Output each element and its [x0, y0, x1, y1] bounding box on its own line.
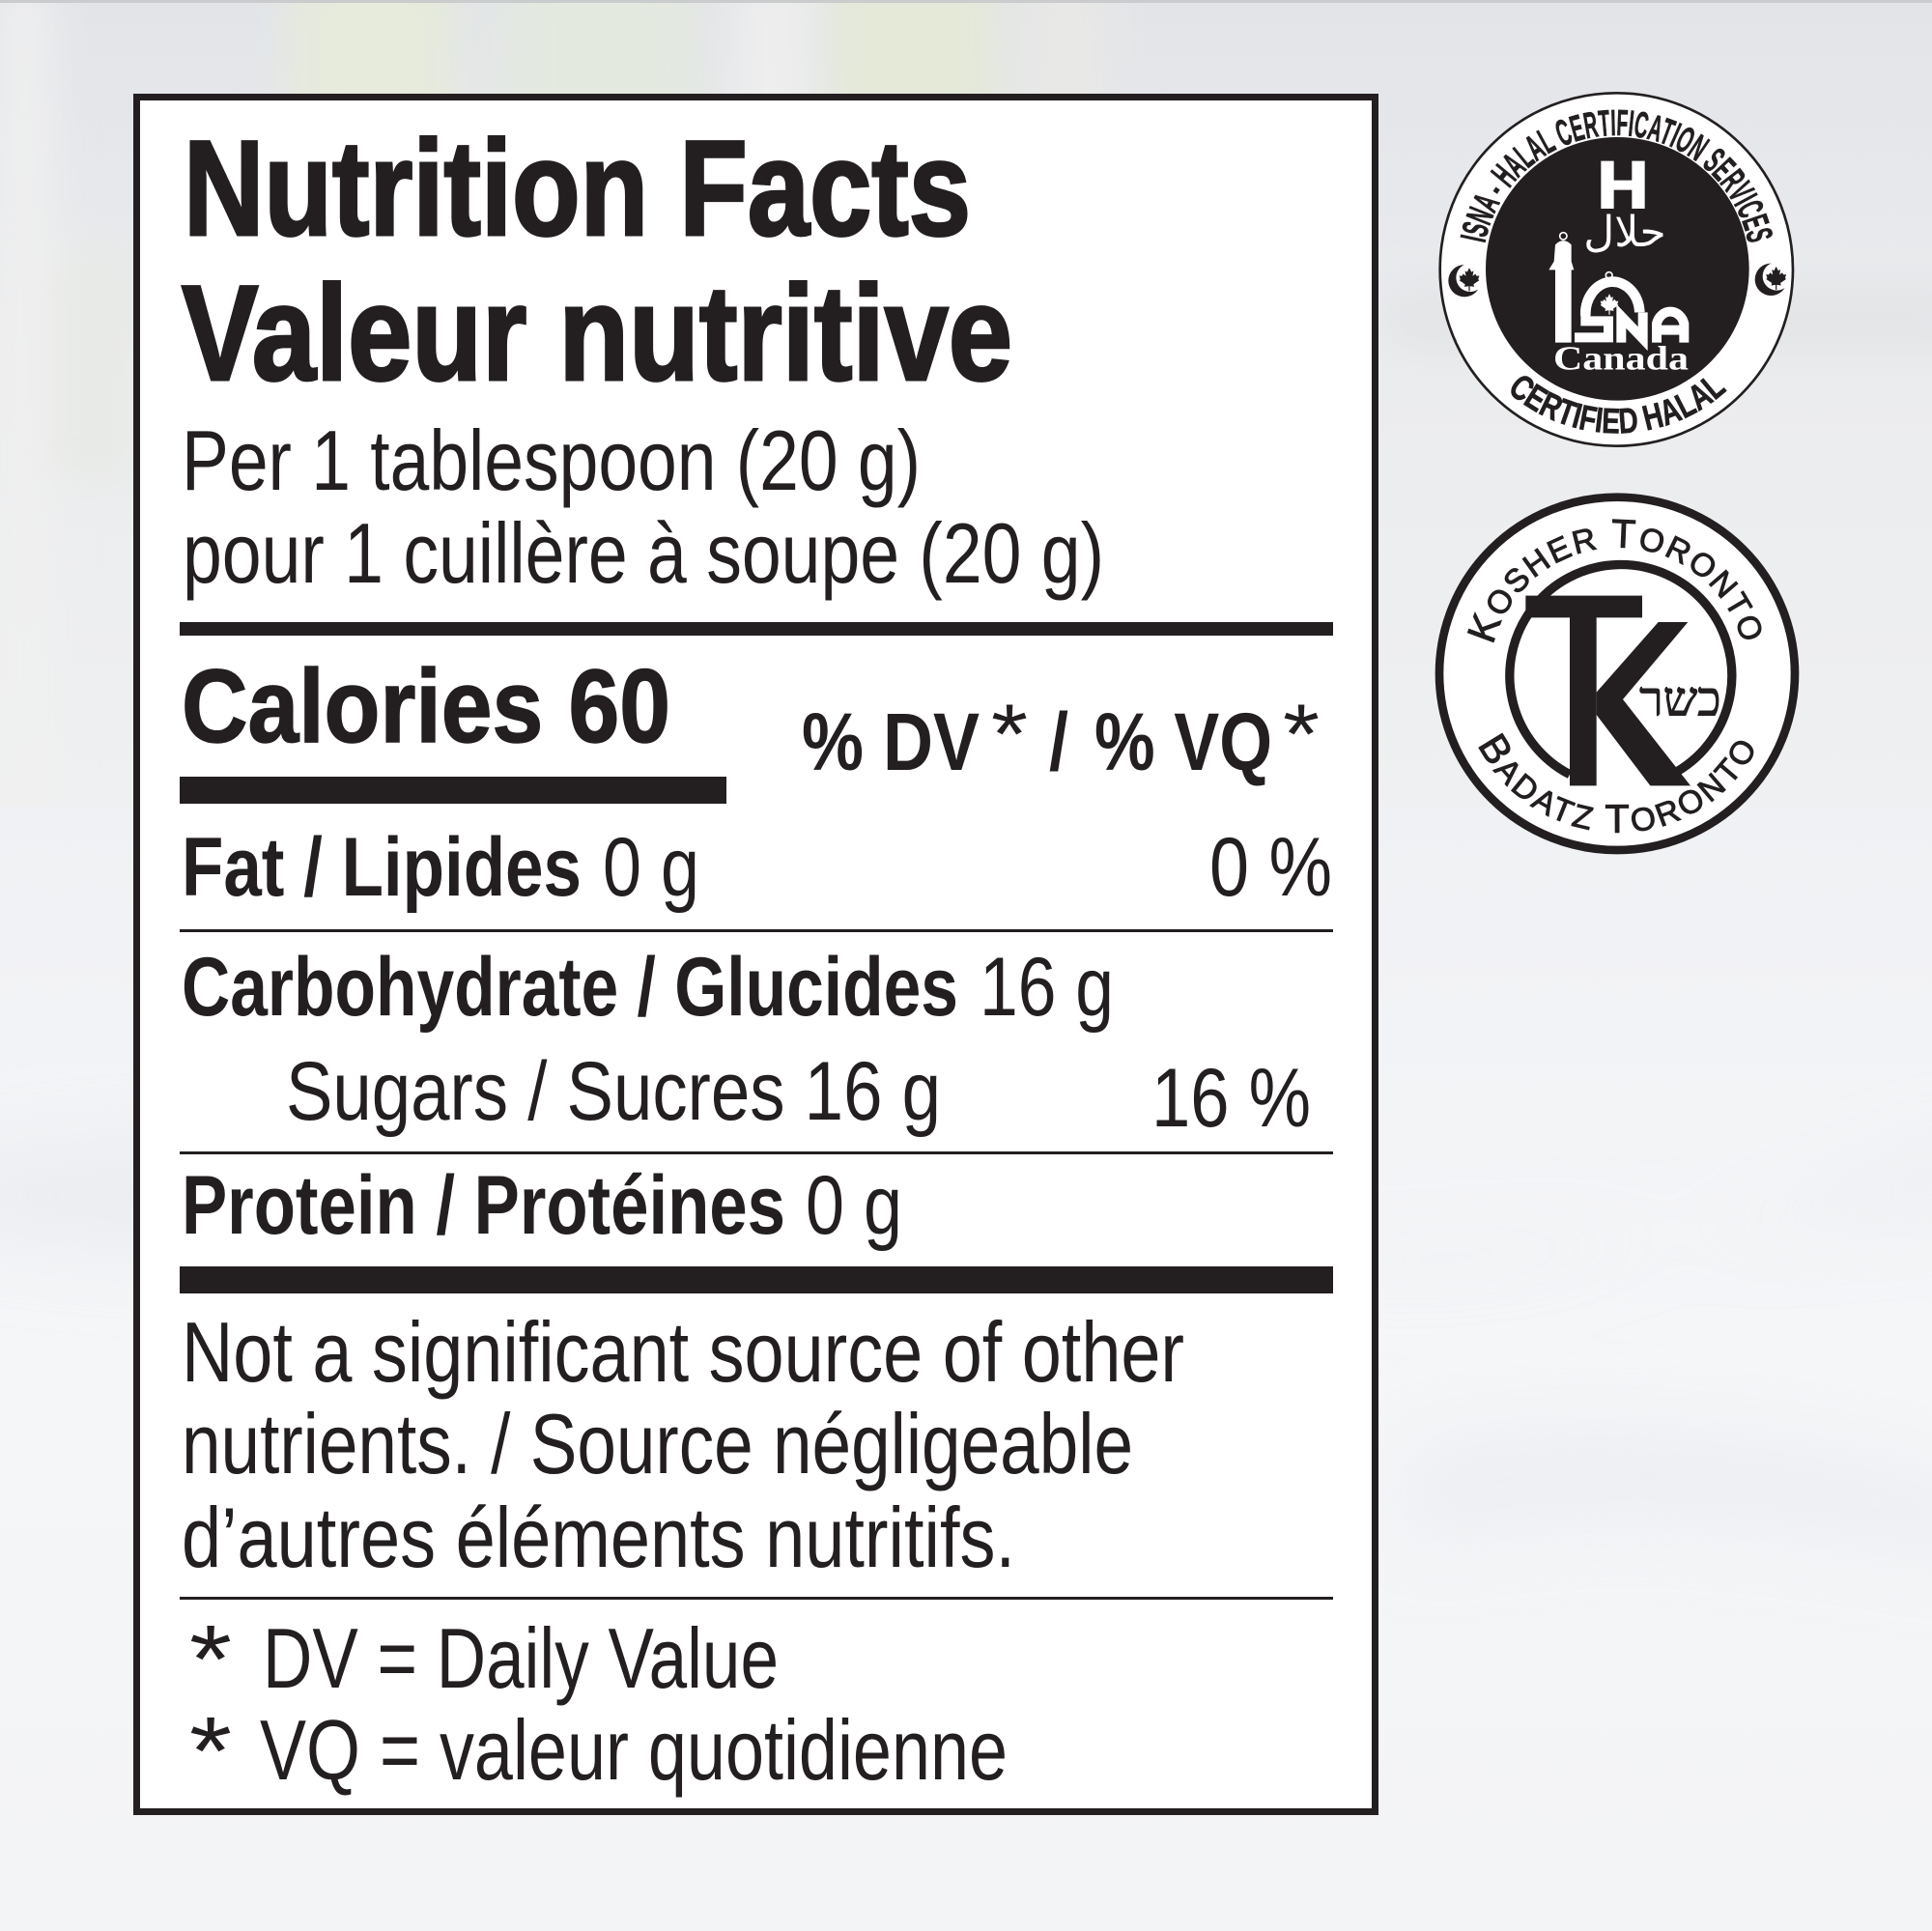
arabic word halal: حلال: [1583, 208, 1666, 257]
crescent and leaf left: [1448, 264, 1485, 297]
serving size: Per 1 tablespoon (20 g): [182, 412, 921, 508]
daily value header: *: [1283, 686, 1320, 781]
word Canada: Canada: [1553, 340, 1689, 378]
hebrew word kosher: כשר: [1639, 672, 1721, 726]
crescent and leaf right: [1755, 262, 1791, 296]
footnotes: [189, 1605, 1008, 1805]
footnotes: VQ = valeur quotidienne: [260, 1702, 1008, 1798]
note: other nutrients: Not a significant source of other: [182, 1304, 1184, 1400]
row: protein: Protein / Protéines: [182, 1159, 785, 1252]
row: sugars: Sugars / Sucres 16 g: [286, 1045, 941, 1138]
badge: ISNA halal certification: CERTIFIED HALAL: [1511, 376, 1727, 434]
daily value header: % VQ: [1094, 696, 1272, 787]
row: fat: 0 g: [603, 821, 699, 914]
note: other nutrients: nutrients. / Source négligeable: [182, 1396, 1133, 1491]
letter H: [1601, 161, 1645, 209]
row: fat: 0 %: [1209, 821, 1332, 914]
badge: Kosher Toronto: [1435, 493, 1799, 854]
daily value header: % DV: [802, 696, 980, 787]
title: Nutrition Facts: [184, 112, 971, 264]
serving size: pour 1 cuillère à soupe (20 g): [183, 505, 1104, 601]
row: protein: 0 g: [806, 1159, 902, 1252]
daily value header: *: [991, 686, 1028, 781]
row: carbohydrate: Carbohydrate / Glucides: [182, 941, 958, 1034]
row: sugars: 16 %: [1151, 1052, 1311, 1145]
row: fat: Fat / Lipides: [182, 821, 582, 914]
dome arch: [1585, 282, 1639, 316]
row: carbohydrate: 16 g: [980, 941, 1114, 1034]
dome leaf: [1601, 294, 1618, 315]
note: other nutrients: d’autres éléments nutritifs.: [182, 1490, 1015, 1585]
daily value header: [802, 686, 1320, 787]
serving size: [182, 412, 1104, 601]
title: Valeur nutritive: [182, 257, 1012, 409]
footnotes: DV = Daily Value: [263, 1610, 779, 1706]
badge: ISNA halal certification: [1438, 92, 1795, 447]
TK monogram: [1525, 596, 1690, 785]
footnotes: *: [189, 1605, 232, 1714]
calories: Calories 60: [182, 647, 670, 764]
row: fat: [182, 821, 1332, 914]
top arc text: KOSHER TORONTO: [1466, 519, 1762, 643]
title: [182, 112, 1012, 409]
note: other nutrients: [182, 1304, 1184, 1585]
nutrition facts panel: [137, 97, 1376, 1812]
minaret crescent: [1560, 233, 1567, 240]
bottom arc text: BADATZ TORONTO: [1478, 732, 1754, 833]
daily value header: /: [1049, 696, 1068, 787]
badge: ISNA halal certification: ISNA - HALAL CERTIFICATION SERVICES: [1461, 110, 1773, 243]
footnotes: *: [189, 1697, 232, 1805]
dome crescent: [1605, 272, 1612, 278]
ISNA letters: [1575, 309, 1684, 343]
minaret: [1548, 241, 1574, 343]
